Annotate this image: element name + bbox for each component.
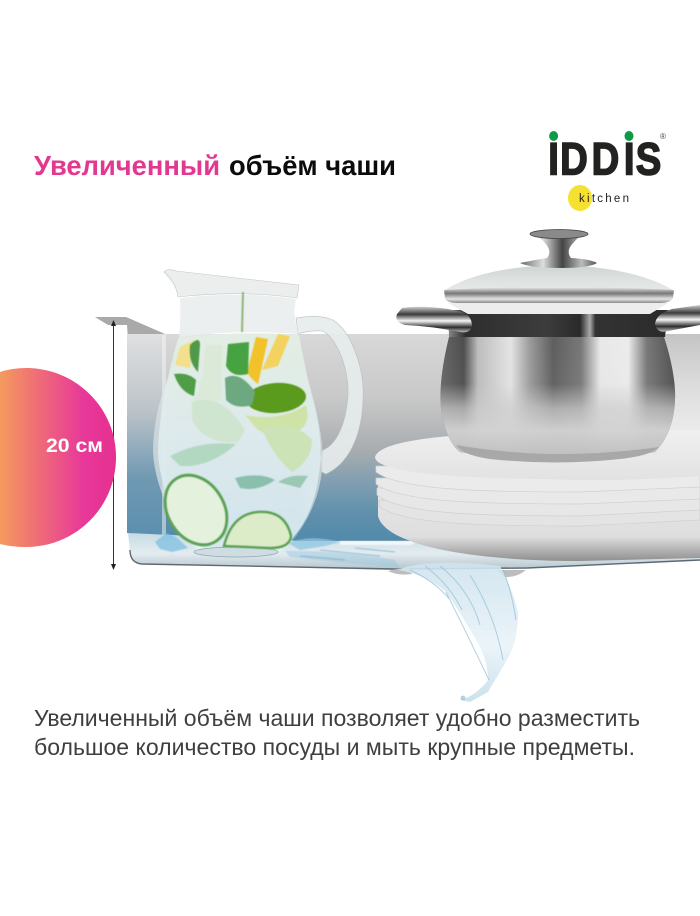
- lemon slices: [175, 334, 290, 384]
- jug glass body: [153, 270, 323, 556]
- left handle: [396, 307, 472, 332]
- jug neck: [179, 295, 298, 337]
- mint leaves and lime wedge: [170, 292, 312, 489]
- dimension arrow: 20 cm: [111, 320, 116, 570]
- logo: IDDIS kitchen: ®: [660, 132, 666, 141]
- jug base: [194, 547, 278, 557]
- badge: 20 cm: 20 см: [46, 436, 103, 457]
- jug handle: [296, 316, 363, 474]
- jug with lemonade: [153, 270, 363, 557]
- badge: 20 cm: [0, 368, 116, 547]
- body text: большое количество посуды и мыть крупные предметы.: [34, 734, 635, 760]
- logo: IDDIS kitchen: kitchen: [579, 193, 629, 205]
- lime slices: [153, 464, 291, 556]
- title: объём чаши: [229, 150, 396, 181]
- water stream from drain: [388, 563, 526, 702]
- pot dark band: [448, 310, 668, 337]
- lid rim: [444, 287, 674, 303]
- pot body: [440, 337, 675, 460]
- logo: IDDIS kitchen: IDDIS: [548, 134, 661, 184]
- pot lid: [445, 265, 673, 296]
- title: [34, 150, 396, 181]
- body text: [34, 705, 640, 760]
- jug water: [158, 333, 321, 552]
- title: Увеличенный: [34, 150, 220, 181]
- body text: Увеличенный объём чаши позволяет удобно разместить: [34, 705, 640, 731]
- sink bowl: [95, 317, 700, 570]
- pot base: [456, 445, 659, 462]
- right handle: [655, 305, 700, 332]
- plates stack: [375, 430, 700, 561]
- pot with lid: [396, 230, 700, 462]
- logo: IDDIS kitchen: [548, 131, 666, 211]
- lid knob: [520, 230, 597, 268]
- jug rim: [164, 270, 299, 298]
- water splash on sink floor: [155, 533, 420, 568]
